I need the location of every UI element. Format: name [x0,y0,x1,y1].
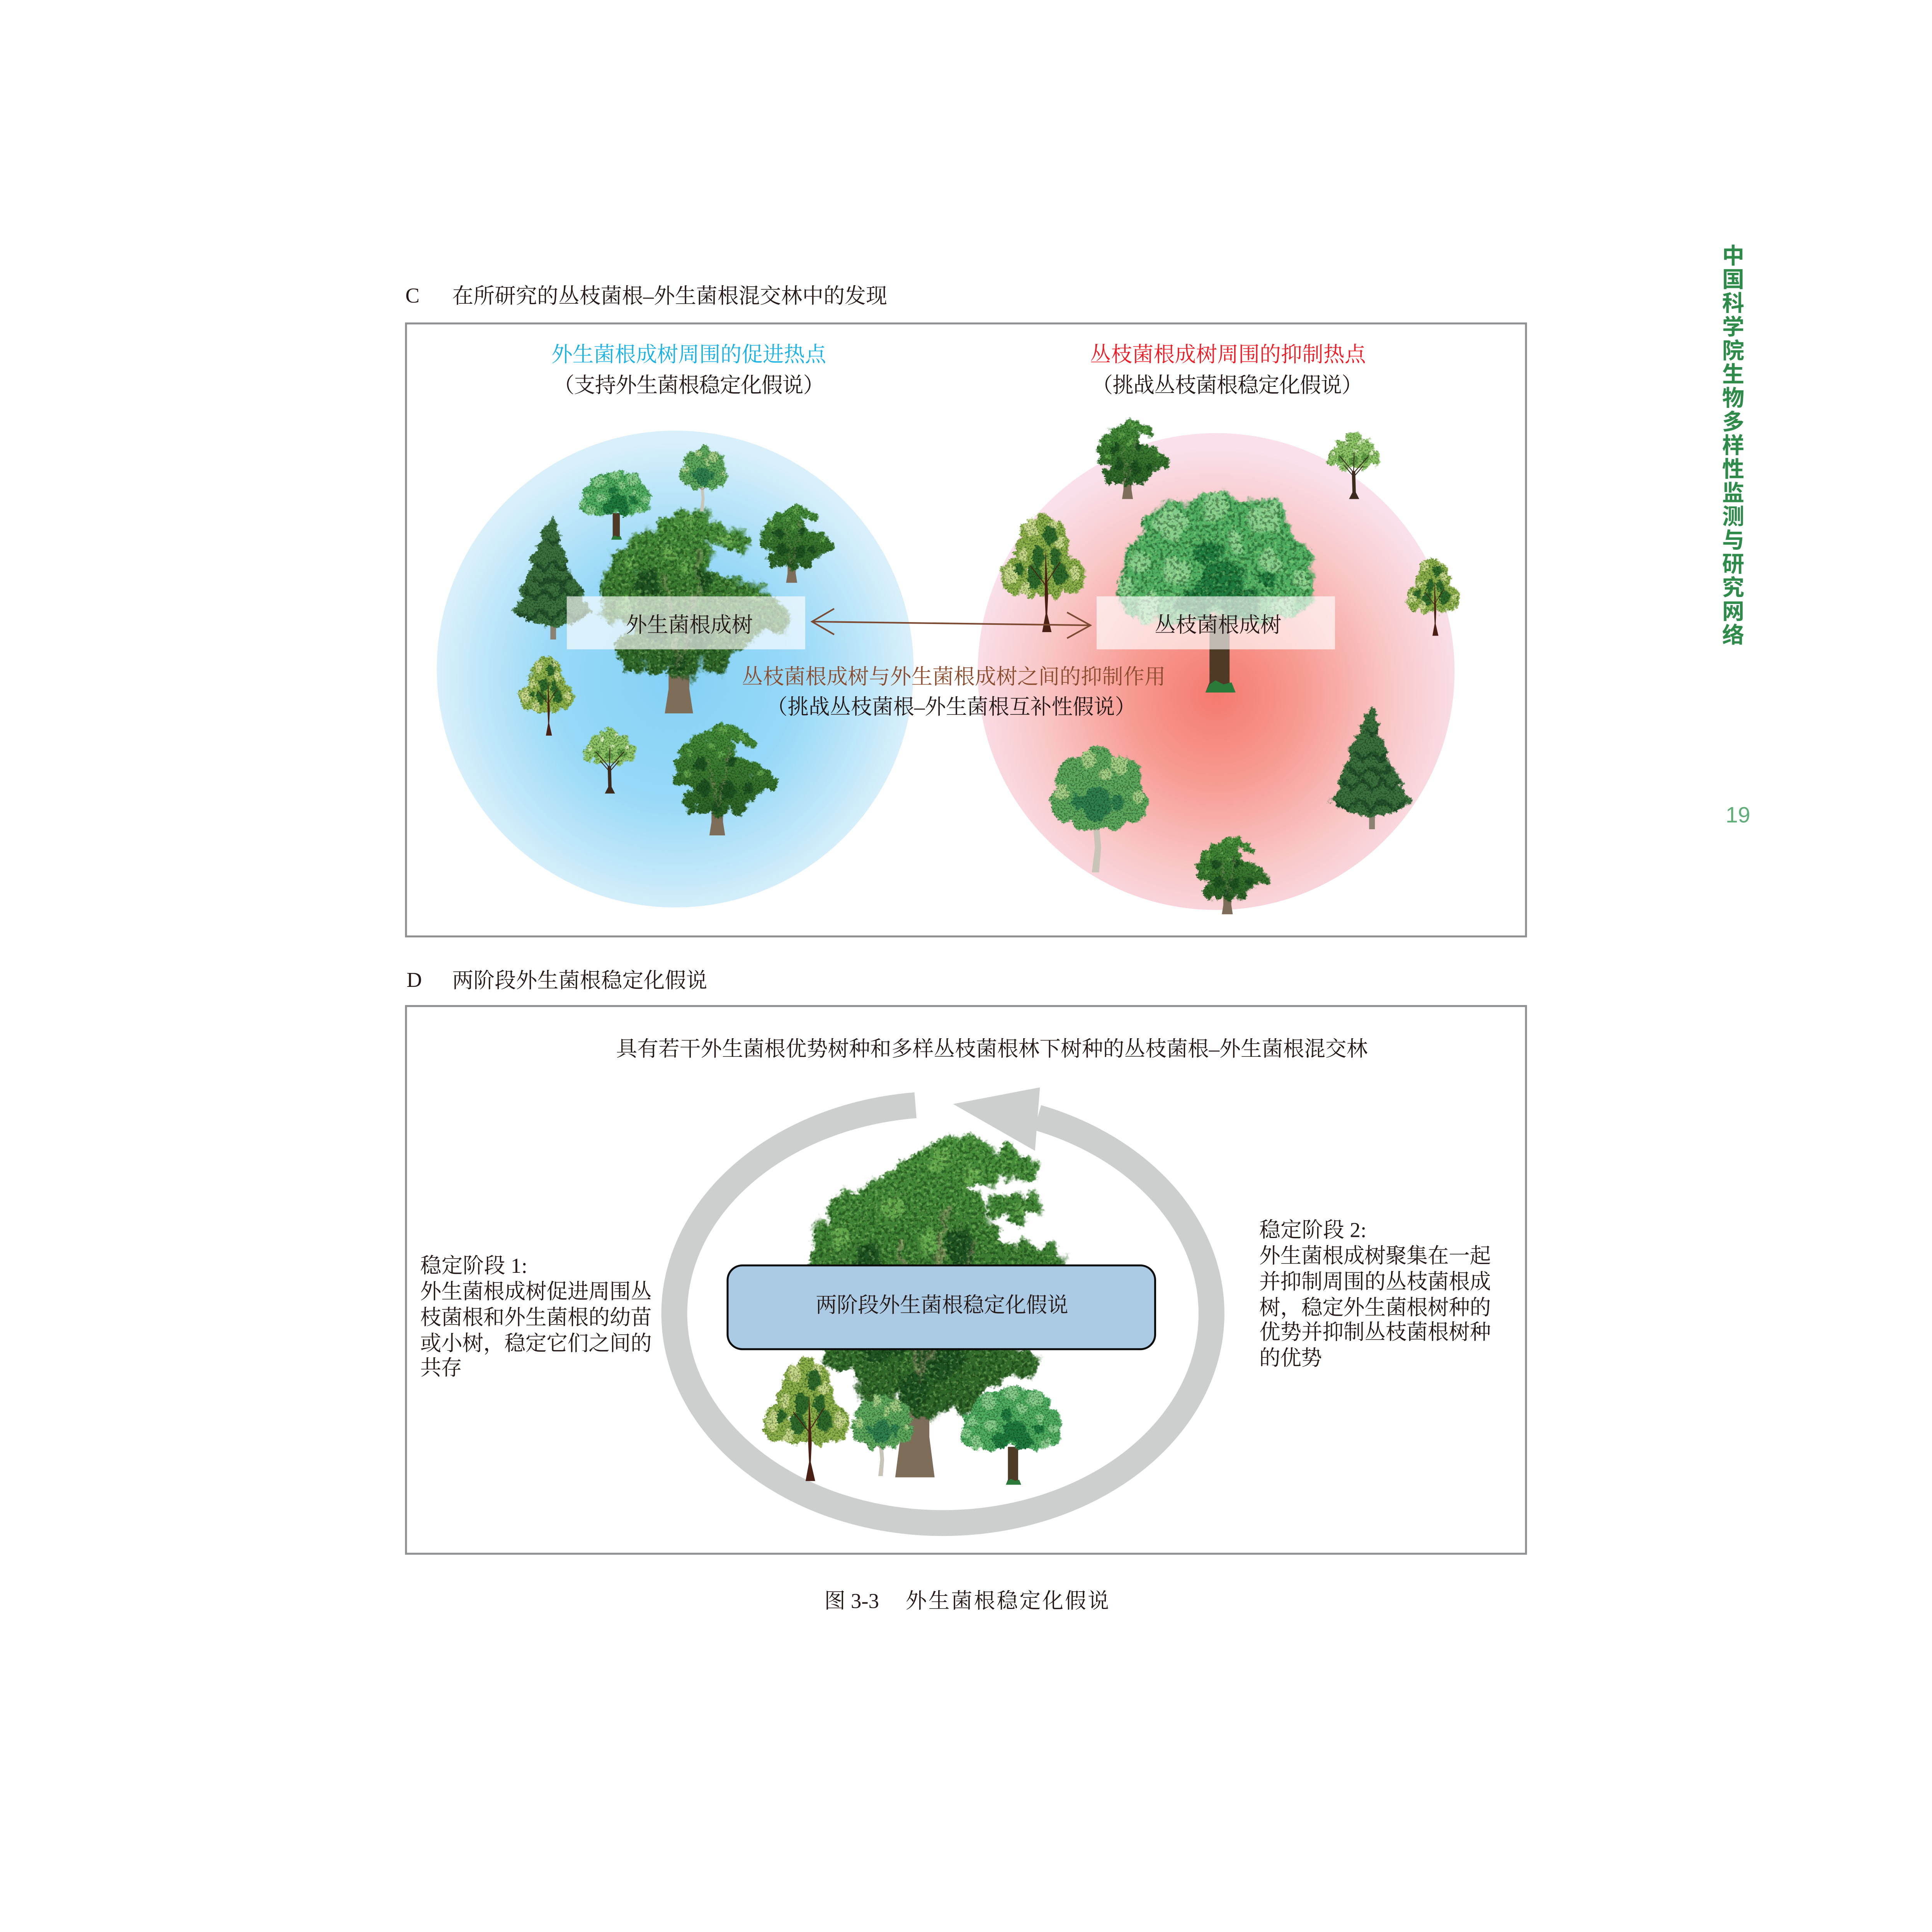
heading: panel C title: 在所研究的丛枝菌根–外生菌根混交林中的发现 [452,284,887,308]
tree: yellow green [519,656,574,736]
tree: birch [852,1394,913,1476]
label box: arbuscular adult: 丛枝菌根成树 [1155,613,1281,637]
tree: yellow green [764,1358,849,1481]
text: stage 2: 优势并抑制丛枝菌根树种 [1259,1320,1491,1344]
tree: birch [1050,747,1148,872]
tree: yellow green right [1406,557,1459,636]
cycle arrow [674,1087,1211,1523]
text: stage 2: 并抑制周围的丛枝菌根成 [1259,1270,1491,1293]
panel C frame [406,323,1526,936]
panel: C section [405,284,1526,936]
text: stage 2: 树，稳定外生菌根树种的 [1259,1296,1491,1319]
side title: 中国科学院生物多样性监测与研究网络 [1719,244,1744,647]
text: inhibition between adults: 丛枝菌根成树与外生菌根成树之间的抑制作用 [742,665,1166,689]
heading: promotion hotspot: 外生菌根成树周围的促进热点 [551,343,827,366]
tree: conifer [1330,706,1412,829]
tree group: left circle [511,447,834,835]
text: stage 2: 稳定阶段 2: [1259,1218,1366,1242]
tree: large arbuscular adult [1117,492,1314,692]
text: supports EM stabilization: （支持外生菌根稳定化假说） [553,374,824,397]
tree: light green [583,728,636,794]
page number: 19 [1726,803,1750,828]
text: stage 2 [1259,1218,1491,1370]
label box: arbuscular adult [1097,596,1335,649]
text: stage 1 [420,1254,652,1380]
tree: large adult [809,1134,1063,1477]
heading: inhibition hotspot: 丛枝菌根成树周围的抑制热点 [1090,343,1366,366]
circle: arbuscular inhibition hotspot [978,433,1454,910]
tree: yellow green left [1001,514,1085,632]
circle: ectomycorrhizal promotion hotspot [437,430,913,908]
caption: 图 3-3 [824,1589,879,1612]
arrow: mutual inhibition [812,609,1090,638]
tree: round crown [580,470,650,540]
heading: D: D [406,968,422,992]
text: forest description: 具有若干外生菌根优势树种和多样丛枝菌根林下树种的丛枝菌根–外生菌根混交林 [616,1037,1368,1061]
tree: small oak [760,505,834,583]
text: challenges AM stabilization: （挑战丛枝菌根稳定化假说） [1092,374,1363,397]
text: challenges complementarity: （挑战丛枝菌根–外生菌根互补性假说） [766,695,1136,719]
text: stage 2: 外生菌根成树聚集在一起 [1259,1244,1491,1267]
panel: D section [406,968,1526,1554]
heading: C: C [405,284,420,307]
label box: ectomycorrhizal adult: 外生菌根成树 [626,613,753,637]
tree: round crown [961,1386,1061,1485]
text: stage 2: 的优势 [1259,1346,1322,1370]
tree: lower oak [673,723,777,835]
text: stage 1: 枝菌根和外生菌根的幼苗 [420,1306,652,1329]
tree: light green [1328,432,1381,499]
text: stage 1: 共存 [420,1356,462,1380]
label box: ectomycorrhizal adult [567,596,805,649]
tree: upper oak [1097,420,1169,499]
tree: conifer [511,515,593,639]
box: two-stage hypothesis [728,1265,1155,1349]
box: two-stage hypothesis: 两阶段外生菌根稳定化假说 [816,1293,1068,1317]
caption: 外生菌根稳定化假说 [906,1589,1109,1612]
tree group: right circle [1001,420,1459,914]
tree: lower oak [1196,837,1269,914]
panel D frame [406,1006,1526,1554]
tree: birch [680,447,727,511]
heading: panel D title: 两阶段外生菌根稳定化假说 [452,969,707,992]
text: stage 1: 外生菌根成树促进周围丛 [420,1280,652,1303]
tree: large ectomycorrhizal adult [599,510,787,713]
text: stage 1: 稳定阶段 1: [420,1254,527,1277]
text: stage 1: 或小树，稳定它们之间的 [420,1332,652,1355]
